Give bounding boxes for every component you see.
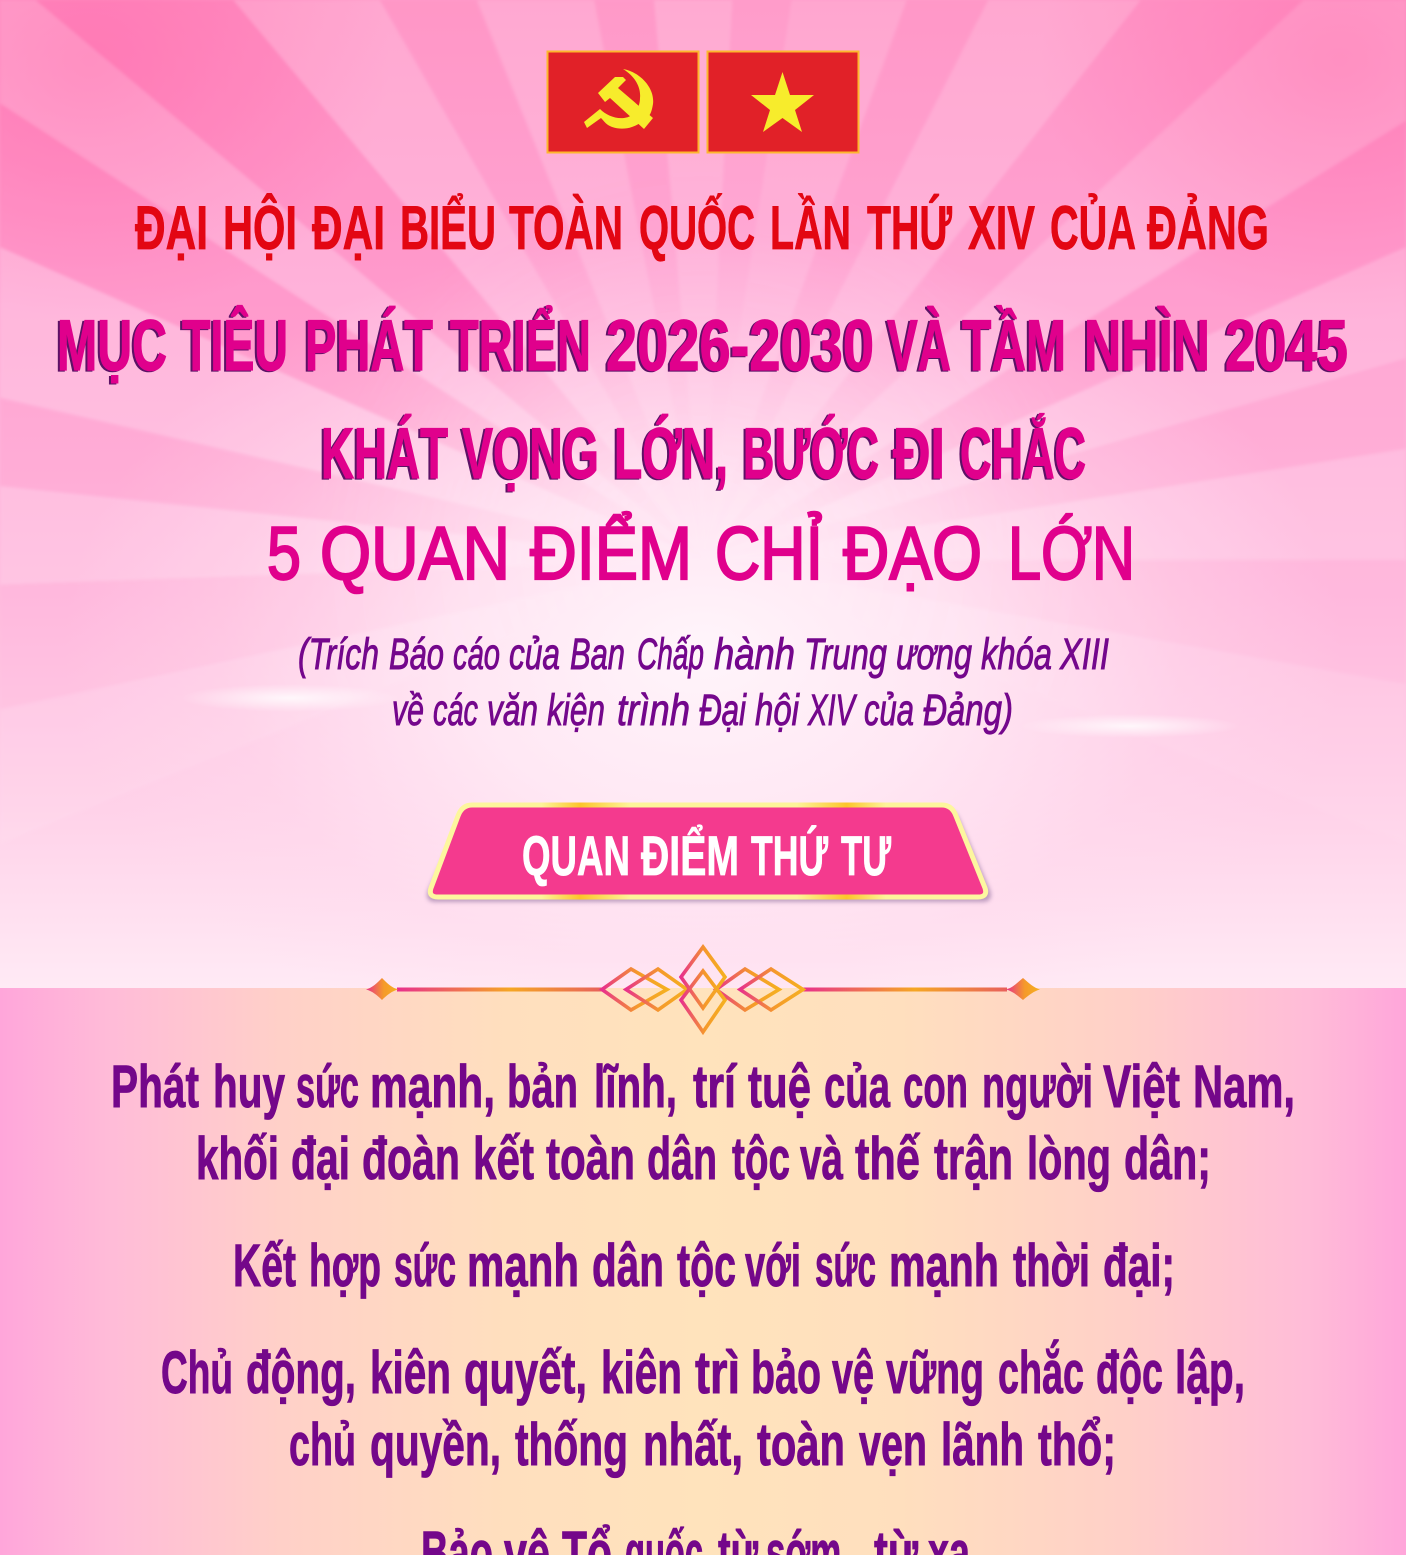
title: congress heading: HỘI: [223, 193, 297, 263]
title: slogan: LỚN,: [614, 414, 728, 494]
title: development goals: NHÌN: [1084, 306, 1210, 386]
text block: main statements: Chủ: [161, 1339, 233, 1406]
subtitle: source note: (Trích: [298, 630, 379, 679]
subtitle: source note: Chấp: [637, 630, 704, 679]
text block: main statements: động,: [246, 1339, 356, 1406]
text block: main statements: toàn: [546, 1125, 635, 1192]
title: slogan: VỌNG: [462, 414, 599, 494]
subtitle: source note: Đại: [699, 686, 747, 735]
text block: main statements: lãnh: [941, 1411, 1024, 1478]
banner: fourth viewpoint: TƯ: [841, 824, 891, 887]
banner: fourth viewpoint: ĐIỂM: [641, 824, 739, 887]
text block: main statements: trí: [693, 1053, 738, 1120]
text block: main statements: lập,: [1175, 1339, 1245, 1406]
text block: main statements: huy: [213, 1053, 285, 1120]
subtitle: source note: [298, 630, 1109, 735]
subtitle: source note: hội: [755, 686, 800, 735]
title: development goals: TRIỂN: [450, 305, 591, 386]
subtitle: source note: hành: [714, 630, 795, 679]
text block: main statements: dân;: [1124, 1125, 1211, 1192]
title: development goals: TIÊU: [182, 305, 288, 386]
title: five guiding viewpoints: ĐIỂM: [530, 511, 692, 595]
text block: main statements: thế: [855, 1125, 920, 1192]
text block: main statements: trận: [934, 1125, 1013, 1192]
text block: main statements: thời: [1013, 1232, 1090, 1299]
banner: fourth viewpoint: THỨ: [751, 824, 828, 887]
subtitle: source note: trình: [617, 686, 690, 735]
title: five guiding viewpoints: [267, 511, 1135, 595]
banner: fourth viewpoint: [427, 805, 991, 902]
title: slogan: ĐI: [893, 414, 945, 494]
text block: main statements: lòng: [1027, 1125, 1111, 1192]
text block: main statements: bản: [507, 1053, 578, 1120]
text block: main statements: [111, 1053, 1295, 1555]
title: slogan: [321, 413, 1086, 494]
text block: main statements: vệ: [832, 1339, 874, 1406]
title: development goals: VÀ: [887, 306, 951, 386]
text block: main statements: tuệ: [748, 1053, 811, 1120]
text block: main statements: sức: [296, 1053, 359, 1120]
text block: main statements: vẹn: [859, 1411, 927, 1478]
title: five guiding viewpoints: LỚN: [1008, 511, 1135, 595]
text block: main statements: nhất,: [643, 1411, 743, 1478]
subtitle: source note: Trung: [804, 630, 887, 679]
title: development goals: MỤC: [57, 306, 167, 386]
title: congress heading: BIỂU: [400, 193, 496, 263]
text block: main statements: hợp: [309, 1232, 381, 1299]
subtitle: source note: cáo: [453, 630, 500, 679]
title: congress heading: LẦN: [770, 193, 851, 263]
text block: main statements: đại: [291, 1125, 350, 1192]
subtitle: source note: kiện: [547, 686, 605, 735]
text block: main statements: mạnh: [889, 1232, 999, 1299]
text block: main statements: toàn: [757, 1411, 845, 1478]
subtitle: source note: khóa: [981, 630, 1052, 679]
title: congress heading: ĐẢNG: [1147, 193, 1269, 263]
text block: main statements: mạnh: [467, 1232, 579, 1299]
subtitle: source note: Ban: [570, 630, 625, 679]
title: five guiding viewpoints: 5: [267, 511, 301, 595]
text block: main statements: thổ;: [1038, 1411, 1116, 1478]
text block: main statements: độc: [1096, 1339, 1163, 1406]
text block: main statements: sức: [394, 1232, 456, 1299]
title: development goals: TẦM: [962, 305, 1066, 386]
subtitle: source note: Đảng): [923, 686, 1013, 735]
text block: main statements: chủ: [289, 1411, 356, 1478]
subtitle: source note: văn: [487, 686, 538, 735]
text block: main statements: tộc: [732, 1125, 790, 1192]
title: five guiding viewpoints: QUAN: [320, 511, 510, 595]
text block: main statements: khối: [196, 1125, 279, 1192]
subtitle: source note: ương: [896, 630, 972, 679]
title: congress heading: [135, 193, 1269, 263]
text block: main statements: mạnh,: [370, 1053, 495, 1120]
subtitle: source note: XIII: [1059, 630, 1109, 679]
text block: main statements: lĩnh,: [594, 1053, 677, 1120]
text block: main statements: bảo: [751, 1339, 821, 1406]
text block: main statements: với: [745, 1232, 801, 1299]
text block: main statements: đoàn: [362, 1125, 460, 1192]
title: five guiding viewpoints: CHỈ: [715, 511, 823, 595]
text block: main statements: chắc: [998, 1339, 1084, 1406]
title: development goals: [57, 305, 1348, 386]
text block: main statements: của: [824, 1053, 890, 1120]
text block: main statements: kết: [473, 1125, 534, 1192]
title: slogan: CHẮC: [960, 413, 1086, 494]
text block: main statements: Kết: [233, 1232, 296, 1299]
subtitle: source note: các: [433, 686, 478, 735]
title: development goals: PHÁT: [305, 306, 433, 386]
subtitle: source note: của: [864, 686, 914, 735]
divider ornament: [366, 947, 1040, 1032]
icon: party flag: [548, 52, 698, 152]
light flares: [180, 684, 1240, 738]
text block: main statements: quyết,: [464, 1339, 587, 1406]
subtitle: source note: của: [509, 630, 560, 679]
text block: main statements: thống: [515, 1411, 628, 1478]
title: congress heading: CỦA: [1050, 193, 1136, 263]
title: congress heading: ĐẠI: [135, 194, 208, 263]
text block: main statements: dân: [592, 1232, 664, 1299]
title: five guiding viewpoints: ĐẠO: [843, 511, 982, 595]
text block: main statements: trì: [695, 1339, 740, 1406]
subtitle: source note: Báo: [389, 630, 444, 679]
text block: main statements: kiên: [601, 1339, 682, 1406]
title: slogan: KHÁT: [321, 414, 448, 494]
text block: main statements: quyền,: [370, 1411, 501, 1478]
background: sun rays: [0, 0, 1405, 582]
background: top pink sunburst: [0, 0, 1406, 988]
text block: main statements: Việt: [1103, 1053, 1180, 1120]
text block: main statements: dân: [647, 1125, 717, 1192]
title: congress heading: THỨ: [867, 194, 952, 263]
title: slogan: BƯỚC: [743, 414, 879, 494]
text block: main statements: con: [903, 1053, 968, 1120]
text block: main statements: tộc: [677, 1232, 736, 1299]
banner: fourth viewpoint: QUAN: [522, 824, 630, 887]
title: congress heading: XIV: [968, 194, 1035, 263]
title: development goals: 2045: [1225, 306, 1348, 386]
subtitle: source note: về: [392, 686, 424, 735]
text block: main statements: sức: [815, 1232, 876, 1299]
title: development goals: 2026-2030: [606, 306, 874, 386]
text block: main statements: kiên: [370, 1339, 451, 1406]
text block: main statements: và: [800, 1125, 843, 1192]
text block: main statements: vững: [886, 1339, 984, 1406]
text block: main statements: đại;: [1103, 1232, 1175, 1299]
icon: national flag: [708, 52, 858, 152]
subtitle: source note: XIV: [807, 686, 857, 735]
text block: main statements: Phát: [111, 1053, 199, 1120]
text block: main statements: người: [982, 1053, 1093, 1120]
title: congress heading: TOÀN: [509, 194, 623, 263]
title: congress heading: ĐẠI: [312, 194, 385, 263]
background: lower cream panel: [0, 988, 1406, 1555]
text block: main statements: Nam,: [1193, 1053, 1295, 1120]
title: congress heading: QUỐC: [639, 193, 755, 263]
